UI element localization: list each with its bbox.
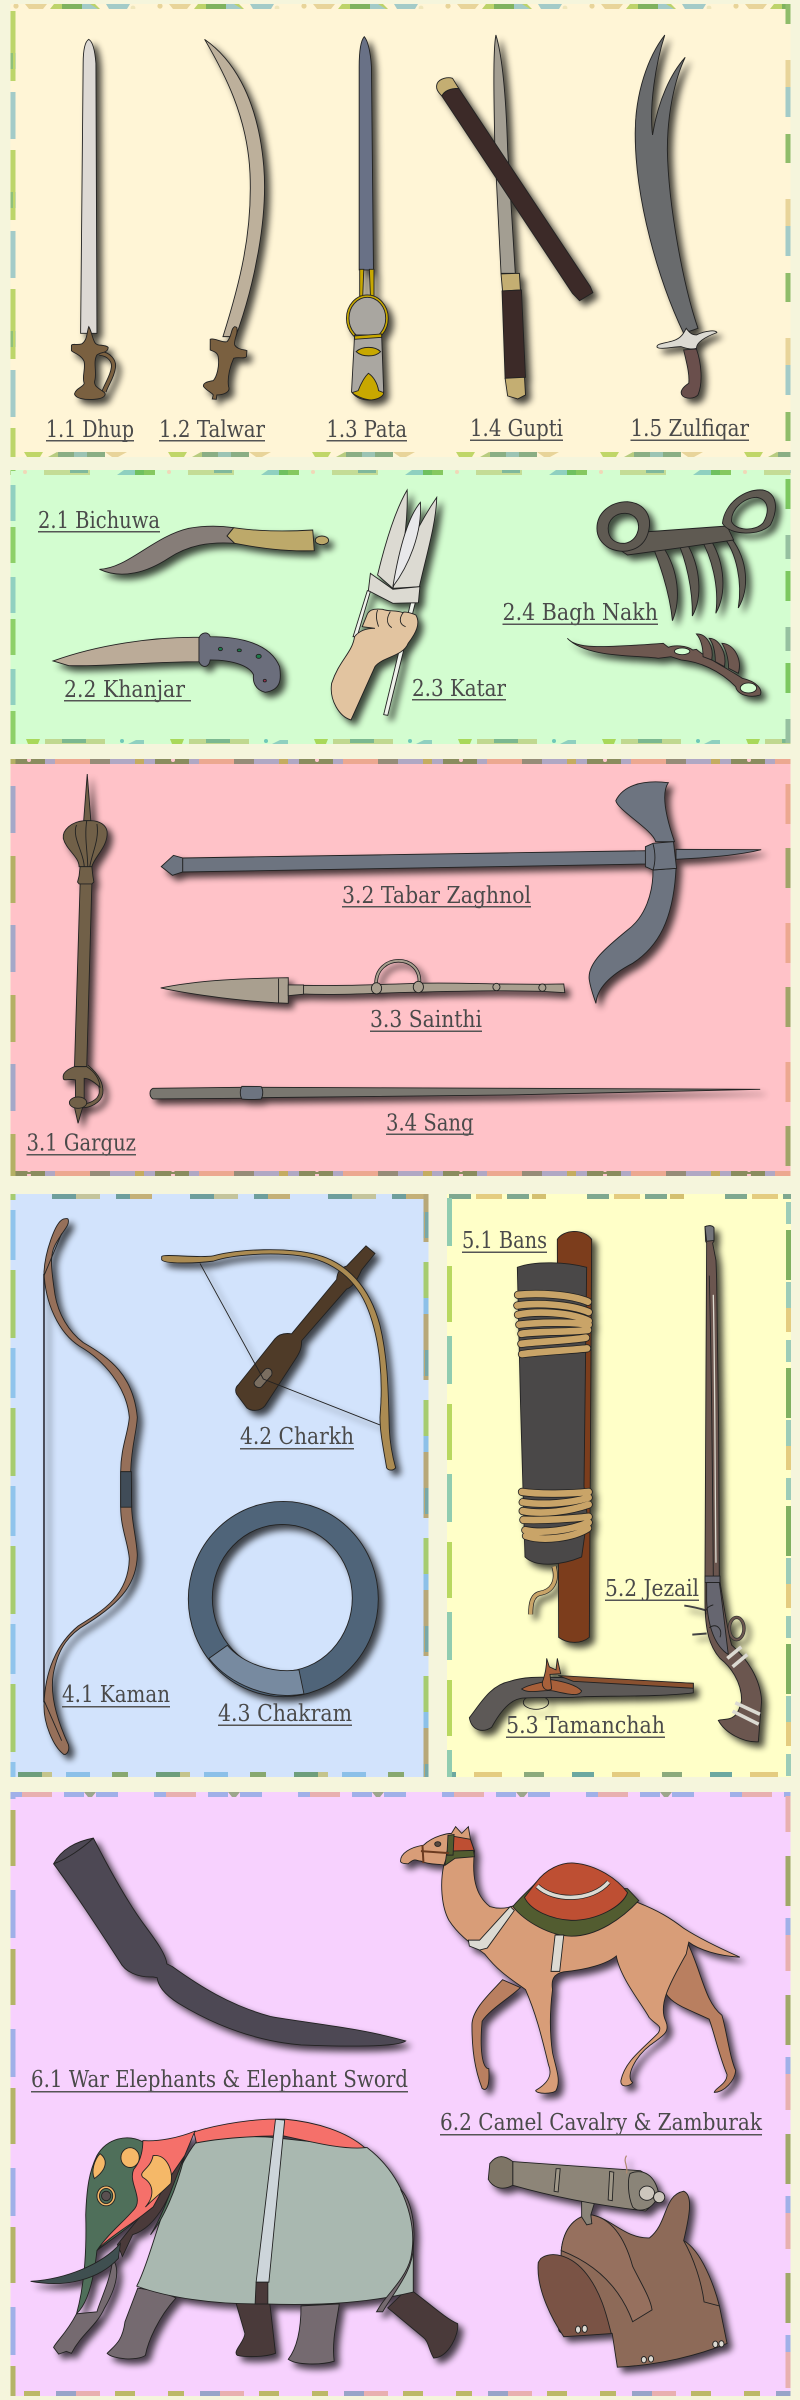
panel: swords bbox=[10, 4, 790, 457]
dagger: 2.2 Khanjar bbox=[53, 633, 280, 692]
panel: daggers bbox=[10, 470, 790, 744]
sword: 1.2 Talwar bbox=[203, 39, 265, 399]
label: 4.3 Chakram: 4.3 Chakram bbox=[218, 1701, 352, 1727]
zamburak cannon on camel saddle bbox=[488, 2156, 727, 2367]
panel: ranged and thrown bbox=[10, 1194, 428, 1777]
sword: 1.4 Gupti bbox=[437, 35, 593, 399]
label: 2.2 Khanjar: 2.2 Khanjar bbox=[64, 677, 185, 703]
label: 3.2 Tabar Zaghnol: 3.2 Tabar Zaghnol bbox=[342, 883, 531, 909]
dagger: 2.1 Bichuwa bbox=[99, 526, 329, 574]
label: 1.2 Talwar: 1.2 Talwar bbox=[159, 417, 265, 443]
bow: 4.1 Kaman bbox=[44, 1219, 137, 1754]
label: 1.1 Dhup: 1.1 Dhup bbox=[46, 417, 134, 443]
label: 3.3 Sainthi: 3.3 Sainthi bbox=[370, 1007, 482, 1033]
label: 2.3 Katar: 2.3 Katar bbox=[412, 676, 506, 702]
label: 2.1 Bichuwa: 2.1 Bichuwa bbox=[38, 508, 160, 534]
label: 5.3 Tamanchah: 5.3 Tamanchah bbox=[506, 1713, 665, 1739]
claws: 2.4 Bagh Nakh bbox=[567, 490, 775, 696]
crossbow: 4.2 Charkh bbox=[162, 1246, 396, 1470]
panel: polearms bbox=[10, 759, 790, 1176]
elephant sword bbox=[54, 1838, 406, 2046]
label: 5.2 Jezail: 5.2 Jezail bbox=[605, 1576, 699, 1602]
label: 6.1 War Elephants and Elephant Sword: 6.1 War Elephants & Elephant Sword bbox=[31, 2067, 408, 2093]
label: 5.1 Bans: 5.1 Bans bbox=[462, 1228, 547, 1254]
weapon: 3.3 Sainthi bbox=[161, 961, 565, 1003]
gun: 5.3 Tamanchah bbox=[469, 1658, 693, 1730]
label: 3.1 Garguz: 3.1 Garguz bbox=[26, 1130, 136, 1156]
sword: 1.3 Pata bbox=[346, 37, 388, 400]
weapon: 3.2 Tabar Zaghnol bbox=[161, 782, 761, 1003]
label: 1.4 Gupti: 1.4 Gupti bbox=[470, 416, 563, 442]
label: 3.4 Sang: 3.4 Sang bbox=[386, 1110, 474, 1136]
ring: 4.3 Chakram bbox=[188, 1501, 378, 1697]
quiver: 5.1 Bans bbox=[517, 1231, 592, 1642]
sword: 1.1 Dhup bbox=[71, 39, 114, 399]
panel: firearms and quiver bbox=[447, 1194, 791, 1777]
label: 6.2 Camel Cavalry and Zamburak: 6.2 Camel Cavalry & Zamburak bbox=[440, 2110, 763, 2136]
war elephant bbox=[31, 2119, 458, 2364]
label: 4.2 Charkh: 4.2 Charkh bbox=[240, 1424, 354, 1450]
label: 4.1 Kaman: 4.1 Kaman bbox=[62, 1682, 170, 1708]
label: 1.3 Pata: 1.3 Pata bbox=[326, 417, 407, 443]
gun: 5.2 Jezail bbox=[684, 1226, 762, 1742]
label: 1.5 Zulfiqar: 1.5 Zulfiqar bbox=[630, 416, 749, 442]
panel: war animals bbox=[10, 1792, 790, 2396]
camel bbox=[401, 1827, 740, 2093]
dagger: 2.3 Katar bbox=[331, 490, 437, 720]
label: 2.4 Bagh Nakh: 2.4 Bagh Nakh bbox=[502, 600, 658, 626]
weapon: 3.4 Sang bbox=[150, 1086, 760, 1099]
weapon: 3.1 Garguz bbox=[63, 774, 107, 1123]
sword: 1.5 Zulfiqar bbox=[635, 35, 717, 398]
